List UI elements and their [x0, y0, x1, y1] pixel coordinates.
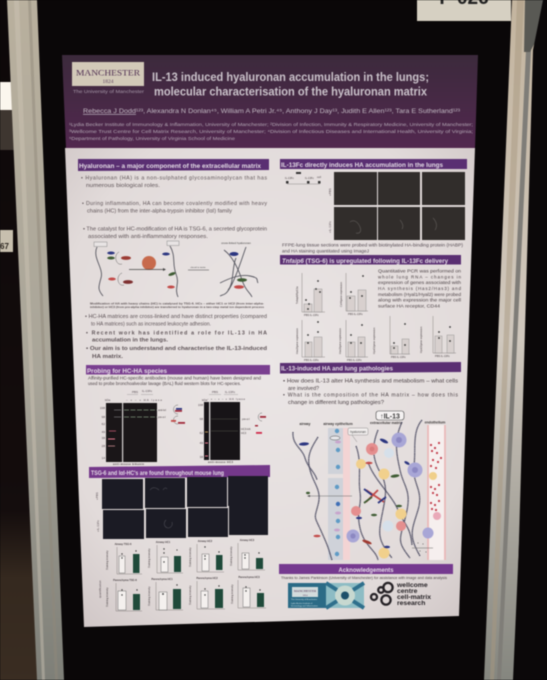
qPCR description: metabolism (Hyal1/Hyal2) were probed	[378, 292, 462, 297]
chart: airway HC3: Airway HC3	[240, 538, 255, 542]
chart: airway HC3: Staining intensity	[229, 546, 233, 566]
poster title: IL-13 induced hyaluronan accumulation in the lungs;	[152, 70, 429, 84]
row labels	[328, 188, 332, 233]
neighbouring booth number tag	[0, 230, 13, 252]
qPCR description: Quantitative PCR was performed on	[378, 268, 462, 274]
probing description	[88, 376, 262, 386]
University of Manchester logo	[72, 62, 145, 94]
chart: parenchyma HC2	[188, 576, 225, 609]
heading: IL-13Fc: IL-13Fc directly induces HA accumulation in the lungs	[281, 162, 443, 169]
further bullets: • Our aim is to understand and characterise the IL-13-induced	[86, 346, 267, 352]
chart: airway TSG-6	[105, 542, 142, 574]
western blot: bikunin	[100, 389, 185, 466]
chart: parenchyma HC3	[230, 575, 266, 608]
lung diagram labels: airway epithelium	[323, 422, 353, 426]
quantification bar charts	[105, 538, 266, 611]
western blot: bikunin: pre-α-I	[158, 415, 166, 419]
further bullets: • Recent work has identified a role for IL-13 in HA	[86, 330, 267, 336]
western blot: HC3: IL-13Fc	[225, 390, 236, 394]
diagram caption	[90, 302, 265, 309]
lung tissue diagram	[293, 420, 445, 560]
x axis labels: PBS IL-13Fc	[348, 312, 363, 316]
probing description: Affinity-purified HC-specific antibodies (mouse and human) have been designed and	[88, 376, 262, 380]
Wellcome Centre logo: research	[397, 600, 425, 607]
chart: airway TSG-6: Airway TSG-6	[115, 542, 132, 546]
chart: Hyal1: Hyal1/gene expression	[372, 327, 376, 354]
heading: Tnfaip6: Tnfaip6 (TSG-6) is upregulated following IL-13Fc delivery	[282, 258, 448, 265]
intro bullets: associated with anti-inflammatory responses.	[88, 234, 208, 240]
panel: probing for HC-HA species	[86, 365, 270, 466]
chart: Has3	[338, 320, 368, 357]
western blot: HC3: PBS	[212, 390, 218, 394]
western blot: HC3: 98	[200, 417, 203, 421]
western blot: bikunin: IL-13Fc	[142, 389, 153, 393]
University of Manchester logo: The University of Manchester	[73, 89, 145, 94]
chart: parenchyma HC1: Staining intensity	[147, 586, 151, 606]
chart: Ccl4	[339, 273, 368, 311]
further bullets: to HA matrices) such as increased leukocyte adhesion.	[91, 322, 211, 328]
Wellcome Centre logo	[371, 582, 431, 607]
further bullets: HA matrix.	[92, 354, 124, 360]
chart: airway TSG-6: Staining intensity	[105, 550, 109, 570]
matrix cells	[346, 432, 422, 558]
HC modification pathway diagram	[94, 241, 258, 297]
further bullets: accumulation in the lungs.	[92, 338, 169, 344]
chart: parenchyma TSG-6: Parenchyma TSG-6	[113, 578, 137, 582]
panel: Tnfaip6 upregulation	[280, 255, 462, 362]
chart: parenchyma HC2: Parenchyma HC2	[196, 576, 218, 580]
panel: IL-13Fc induces HA accumulation	[280, 159, 467, 254]
right frame post	[484, 0, 547, 680]
western blot: bikunin: 14	[102, 456, 105, 460]
Henry Wellcome / Manchester logo banner: Lydia Becker Institute of	[291, 602, 313, 605]
panel: acknowledgements	[279, 564, 453, 608]
western blot: HC3: kDa	[202, 398, 208, 402]
Henry Wellcome / Manchester logo banner: The University of Manchester	[291, 598, 317, 601]
poster header banner	[62, 55, 478, 148]
chart: Has2	[295, 320, 325, 357]
epithelium layer	[328, 428, 350, 560]
heading: hyaluronan: Hyaluronan – a major component of the extracellular matrix	[79, 163, 261, 170]
migration arrow	[306, 492, 352, 497]
chart: parenchyma HC3: Staining intensity	[230, 584, 234, 604]
western blot: bikunin: anti-mouse bikunin	[113, 462, 144, 466]
western blot: HC3: 62	[200, 431, 203, 435]
Henry Wellcome / Manchester logo banner: MANCHESTER	[294, 589, 317, 593]
western blot: HC3: HC3	[241, 431, 247, 435]
x axis labels: PBS IL-13Fc	[435, 354, 450, 358]
research questions: change in different lung pathologies?	[288, 400, 384, 406]
University of Manchester logo: MANCHESTER	[76, 68, 140, 78]
research questions: are involved?	[288, 386, 319, 392]
western blot: HC3: HC3-HA	[241, 427, 251, 431]
chart: Has3: Has3/gene expression	[338, 328, 342, 354]
chart: parenchyma TSG-6: Staining intensity	[105, 587, 109, 607]
Wellcome Centre logo: cell-matrix	[397, 594, 431, 601]
chart: Tnfaip6	[295, 273, 325, 312]
chart: Has2: Has2/gene expression	[295, 328, 299, 354]
heading: acknowledgements: Acknowledgements	[338, 567, 394, 574]
x axis labels	[304, 312, 450, 362]
panel: hyaluronan introduction	[78, 159, 269, 360]
row labels: +IL-13Fc	[96, 520, 100, 532]
heading: probing: Probing for HC-HA species	[87, 368, 167, 375]
dosing timeline: cull	[317, 175, 321, 179]
authors: Rebecca J Dodd ¹²³, Alexandra N Donlan⁴⁵, William A Petri Jr.⁴⁵, Anthony J Day¹³, Judith E Allen¹²³, Tara E Sutherland¹²³	[83, 108, 461, 115]
vessel leak arrow	[412, 542, 433, 552]
poster title	[152, 70, 429, 98]
heading: TSG-6: TSG-6 and IαI-HC's are found throughout mouse lung	[91, 470, 224, 477]
x axis labels: PBS IL-13Fc	[304, 313, 319, 317]
western blot: bikunin: 49	[102, 430, 105, 434]
qPCR description: along with expression the major cell	[378, 298, 461, 302]
staining caption: FFPE-lung tissue sections were probed with biotinylated HA-binding protein (HABP)	[282, 242, 464, 248]
heavy chain complexes	[299, 438, 410, 548]
western blot: bikunin: 62	[102, 422, 105, 426]
left frame post	[7, 0, 64, 680]
probing description: used to probe bronchoalveolar lavage (BAL) fluid western blots for HC-species.	[88, 381, 241, 386]
intro bullets	[81, 176, 267, 240]
qPCR description: surface HA receptor, CD44	[378, 304, 441, 308]
row labels: +PBS	[328, 188, 332, 196]
IL-13 callout	[376, 411, 404, 420]
poster title: molecular characterisation of the hyaluronan matrix	[154, 84, 427, 98]
lung diagram labels: airway	[300, 422, 310, 426]
qPCR charts	[295, 273, 456, 362]
immunofluorescence image grid	[102, 476, 268, 539]
dosing timeline	[285, 172, 321, 184]
intro bullets: • During inflammation, HA can become covalently modified with heavy	[82, 201, 267, 207]
western blot: HC3: pre-α-I	[242, 417, 250, 421]
row labels: +IL-13Fc	[328, 221, 332, 233]
dosing timeline: IL-13Fc	[305, 176, 314, 180]
affiliations	[69, 122, 473, 141]
intro bullets: • Hyaluronan (HA) is a non-sulphated glycosaminoglycan that has	[81, 176, 267, 182]
lung diagram labels: extracellular matrix	[370, 421, 402, 425]
chart: parenchyma HC1: Parenchyma HC1	[151, 577, 173, 581]
western blot: bikunin: kDa	[105, 398, 111, 402]
intro bullets: chains (HC) from the inter-alpha-trypsin inhibitor (IαI) family	[87, 208, 232, 214]
qPCR description: whole lung RNA – changes in	[378, 274, 461, 280]
x axis labels: PBS IL-13Fc	[347, 358, 362, 362]
western blot: HC3: 49	[200, 441, 203, 445]
chart: parenchyma HC2: Staining intensity	[188, 585, 192, 605]
diagram caption: Modification of HA with heavy chains (HC) is catalysed by TSG-6. HCs – either HC1 or HC2 (from inter-alpha-	[90, 302, 264, 306]
thanks text: Thanks to James Parkinson (University of Manchester) for assistance with image and data analysis	[281, 576, 447, 580]
row labels: +PBS	[95, 492, 99, 500]
chart: Hyal2	[419, 316, 456, 353]
diagram caption: inhibitor) or HC3 (from pre-alpha inhibitor) are transferred to hyaluronan in a two-step metal ion dependent process	[90, 305, 265, 309]
western blot: HC3: 38	[200, 455, 203, 459]
chart: airway HC1: Airway HC1	[156, 540, 171, 544]
neighbouring booth number tag: 67	[0, 242, 9, 251]
chart: Hyal2: Hyal2/gene expression	[419, 326, 423, 353]
HC modification pathway diagram: closed to matrix	[190, 266, 207, 269]
affiliations: ⁵Department of Pathology, University of Virginia School of Medicine	[69, 136, 235, 141]
poster sheet	[65, 148, 475, 627]
hyaluronan chains	[293, 420, 422, 560]
IL-13 callout: ↑IL-13	[380, 414, 400, 420]
qPCR description: HA synthesis (Has2/Has3) and	[378, 286, 461, 291]
western blot: bikunin: 38	[102, 436, 105, 440]
chart: airway HC2: Staining intensity	[188, 547, 192, 567]
chart: Hyal1	[372, 316, 410, 354]
western blot: bikunin: 198	[100, 406, 105, 410]
chart: airway HC1: Staining intensity	[147, 548, 151, 568]
x axis labels: PBS IL-13Fc	[304, 358, 319, 362]
chart: Ccl4: Ccl4/gene expression	[339, 281, 343, 307]
panel: IL-13-induced HA and lung pathologies	[280, 362, 461, 560]
lung diagram labels: endothelium	[425, 420, 445, 424]
HA staining image grid	[334, 172, 465, 240]
further bullets	[85, 314, 267, 360]
chart: airway HC3	[229, 538, 265, 570]
chart: parenchyma TSG-6	[105, 578, 142, 611]
heading: pathologies: IL-13-induced HA and lung pathologies	[281, 366, 393, 372]
research questions	[283, 378, 458, 406]
HC modification pathway diagram: cross-linked hyaluronan	[221, 241, 251, 245]
western blot: HC3: anti-mouse HC3	[208, 460, 234, 464]
panel: TSG-6 and IaI-HC localisation	[89, 465, 270, 611]
chart: airway HC2: Airway HC2	[198, 539, 213, 543]
dosing timeline: IL-13Fc	[285, 176, 294, 180]
Henry Wellcome / Manchester logo banner: 1824	[303, 594, 308, 597]
chart: airway HC2	[188, 539, 224, 572]
Henry Wellcome / Manchester logo banner	[288, 583, 364, 608]
qPCR description	[378, 268, 462, 308]
University of Manchester logo: 1824	[102, 79, 114, 85]
x axis labels: PBS IL-13Fc	[391, 355, 406, 359]
western blot: bikunin: 28	[102, 444, 105, 448]
research questions: • How does IL-13 alter HA synthesis and metabolism – what cells	[283, 378, 458, 384]
western blot: bikunin: 98	[102, 415, 105, 419]
western blot: bikunin: PBS	[132, 390, 138, 394]
intro bullets: numerous biological roles.	[86, 183, 160, 189]
western blot: HC3: – + – + – + HA lyase	[207, 397, 245, 401]
lung diagram labels	[300, 420, 445, 426]
western blot: bikunin: – + – + HA lyase	[126, 398, 162, 402]
chart: Tnfaip6: Tnfaip6/Rpl13a	[295, 286, 299, 304]
western blot: HC3: 198	[198, 403, 203, 407]
quantification label: quantification	[98, 580, 102, 598]
chart: parenchyma HC3: Parenchyma HC3	[238, 575, 260, 579]
research questions: • What is the composition of the HA matrix – how does this	[283, 392, 458, 398]
row labels	[95, 492, 100, 532]
booth number tag top right	[417, 0, 511, 21]
vessel	[422, 425, 445, 560]
hyaluronan tag	[348, 428, 368, 442]
western blot: HC3	[198, 390, 266, 464]
intro bullets: • The catalyst for HC-modification of HA is TSG-6, a secreted glycoprotein	[83, 226, 267, 232]
Wellcome Centre logo: wellcome	[396, 582, 428, 589]
chart: parenchyma HC1	[147, 577, 183, 610]
further bullets: • HC-HA matrices are cross-linked and have distinct properties (compared	[85, 314, 267, 320]
staining caption	[282, 242, 464, 254]
Wellcome Centre logo: centre	[397, 588, 418, 595]
affiliations: ¹Lydia Becker Institute of Immunology & Inflammation, University of Manchester; ²Division of Infection, Immunity & Respiratory Medicine, University of Manchester;	[69, 122, 473, 127]
western blot: bikunin: anti-IαI	[158, 408, 166, 412]
hyaluronan tag: hyaluronan	[350, 430, 366, 434]
qPCR description: expression of genes associated with	[378, 280, 462, 285]
Henry Wellcome / Manchester logo banner: Immunology and Inflammation	[291, 604, 318, 608]
chart: airway HC1	[147, 540, 183, 573]
staining caption: and HA staining quantitated using ImageJ	[282, 248, 369, 254]
affiliations: ³Wellcome Trust Centre for Cell Matrix Research, University of Manchester; ⁴Division of Infectious Diseases and International Health, University of Virginia;	[69, 129, 473, 134]
